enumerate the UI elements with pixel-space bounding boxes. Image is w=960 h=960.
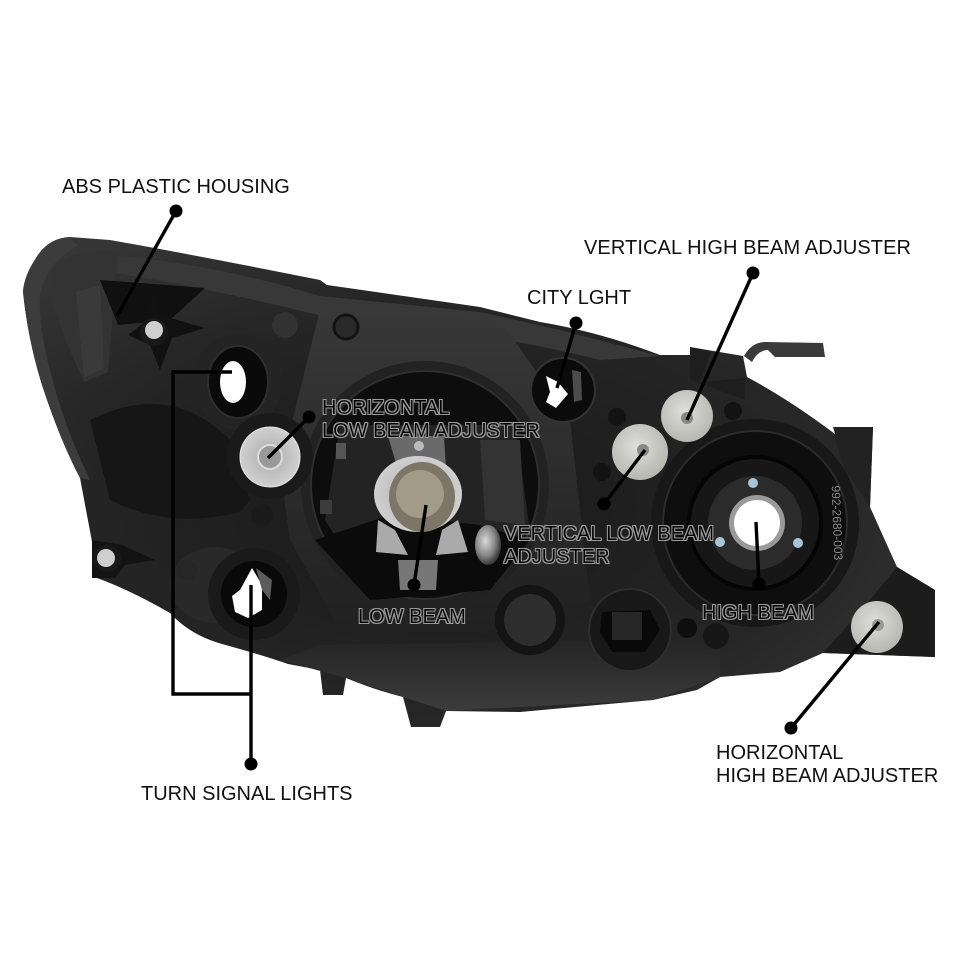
callout: turn signal lights [141,372,353,805]
callout: vertical low beam adjuster: VERTICAL LOW BEAM [504,523,714,545]
callout: low beam: LOW BEAM [358,606,466,628]
turn signal socket upper [194,334,282,430]
high beam assembly [651,419,859,627]
left rim [23,237,90,480]
city light socket [531,358,595,422]
mounting bolt lower [92,540,155,578]
callout: city light: CITY LGHT [527,287,631,309]
adjuster disc: vertical low beam [612,424,668,480]
callout: vertical high beam adjuster [584,237,911,420]
low beam reflector socket [301,361,549,609]
callout: ABS plastic housing: ABS PLASTIC HOUSING [62,176,290,198]
callout: high beam: HIGH BEAM [702,602,814,624]
callout: vertical low beam adjuster [504,450,714,568]
left dark recess [76,285,104,378]
bulb assembly [374,436,501,590]
callout: turn signal lights: TURN SIGNAL LIGHTS [141,783,353,805]
mounting bolt upper [128,290,205,370]
low beam surround [280,310,590,640]
callout: horizontal low beam adjuster: LOW BEAM ADJUSTER [322,420,540,442]
callout: horizontal high beam adjuster: HORIZONTAL [716,742,843,764]
right block [835,427,873,507]
lower body panel [280,640,720,711]
mid left shade [90,404,250,519]
inner reflector lit panels [325,425,530,590]
callout: city light [527,287,631,388]
left panel [52,251,118,382]
small pins [177,312,742,580]
adjuster disc: horizontal high beam [851,601,903,653]
bracket [744,342,825,362]
callout: vertical high beam adjuster: VERTICAL HIGH BEAM ADJUSTER [584,237,911,259]
turn signal socket lower [170,547,300,640]
adjuster disc: horizontal low beam [227,413,313,499]
callout: low beam [358,505,466,628]
housing body [23,237,935,727]
lower sockets [495,585,729,671]
lower right tab [823,567,935,657]
callout: vertical low beam adjuster: ADJUSTER [504,546,610,568]
top lip [110,255,660,360]
tower [690,347,745,400]
callout: horizontal low beam adjuster: HORIZONTAL [322,397,449,419]
callout: horizontal low beam adjuster [268,397,540,458]
callout: ABS plastic housing [62,176,290,316]
headlight housing [23,237,935,727]
callout: horizontal high beam adjuster: HIGH BEAM ADJUSTER [716,765,938,787]
callout: horizontal high beam adjuster [716,622,938,787]
callout: high beam [702,522,814,624]
adjuster disc: vertical high beam [661,390,713,442]
part number: 992-2680-003 [829,485,845,561]
